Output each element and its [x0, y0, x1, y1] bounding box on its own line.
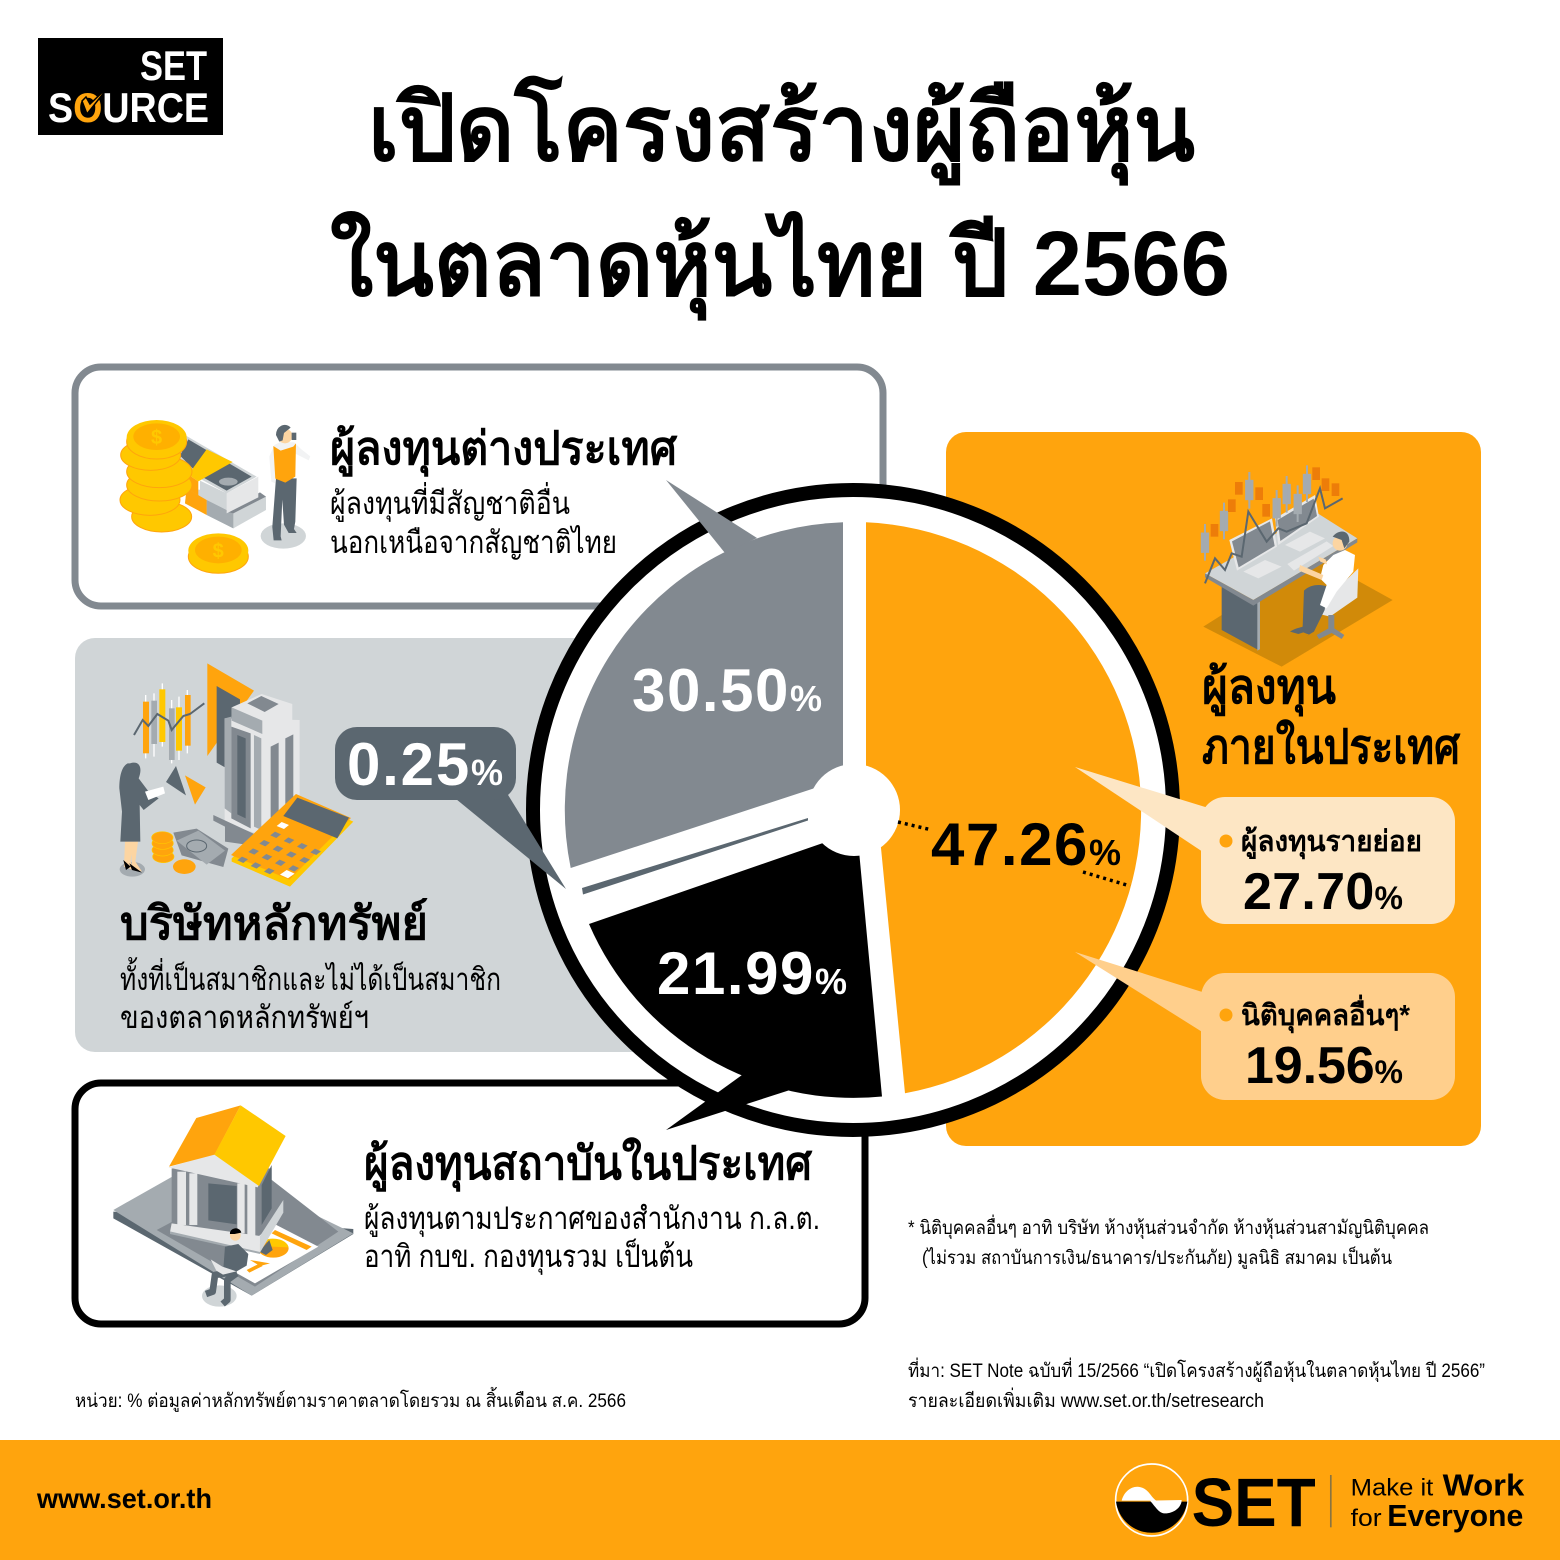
callout wedge: foreign [666, 480, 757, 553]
callout: other juristic persons: 19.56% [1245, 1037, 1403, 1095]
logo: SET: Make it [1351, 1475, 1434, 1502]
value: 47.26%: 47.26% [931, 811, 1121, 878]
slice: institutions 21.99% [589, 840, 882, 1098]
title: เปิดโครงสร้างผู้ถือหุ้น [368, 75, 1195, 186]
heading: ผู้ลงทุนต่างประเทศ [330, 422, 678, 477]
logo: SET: Work [1443, 1469, 1525, 1503]
icon: coins, cash and businessman: $ [213, 540, 224, 562]
icon: building, calculator and analyst [119, 663, 353, 887]
pie chart [533, 480, 1173, 1130]
heading: บริษัทหลักทรัพย์ [120, 897, 428, 949]
value: 30.50%: 30.50% [632, 657, 822, 724]
callout: 0.25%: 0.25% [347, 731, 503, 798]
heading: ผู้ลงทุน [1202, 661, 1336, 717]
panel: domestic investors [946, 432, 1481, 1146]
description [120, 957, 501, 1035]
title [330, 75, 1230, 321]
icon: coins, cash and businessman: $ [151, 427, 162, 449]
callout: retail investors: ผู้ลงทุนรายย่อย [1241, 826, 1422, 859]
description: ผู้ลงทุนที่มีสัญชาติอื่น [330, 482, 570, 523]
logo: SET: Everyone [1387, 1499, 1523, 1533]
logo: SET SOURCE: SOURCE [48, 84, 209, 131]
callout: 0.25% [335, 727, 566, 889]
footnote [908, 1214, 1429, 1269]
unit note: หน่วย: % ต่อมูลค่าหลักทรัพย์ตามราคาตลาดโดยรวม ณ สิ้นเดือน ส.ค. 2566 [75, 1387, 626, 1412]
description: ผู้ลงทุนตามประกาศของสำนักงาน ก.ล.ต. [364, 1201, 820, 1238]
panel: domestic institutions [75, 1083, 865, 1324]
source note: รายละเอียดเพิ่มเติม www.set.or.th/setresearch [908, 1387, 1264, 1412]
source note: ที่มา: SET Note ฉบับที่ 15/2566 “เปิดโครงสร้างผู้ถือหุ้นในตลาดหุ้นไทย ปี 2566” [908, 1357, 1485, 1383]
slice: foreign investors 30.50% [565, 522, 843, 868]
footnote: * นิติบุคคลอื่นๆ อาทิ บริษัท ห้างหุ้นส่วนจำกัด ห้างหุ้นส่วนสามัญนิติบุคคล [908, 1214, 1429, 1240]
heading: ผู้ลงทุนสถาบันในประเทศ [364, 1136, 813, 1192]
callout: retail investors: 27.70% [1243, 863, 1403, 921]
panel: foreign investors [75, 367, 883, 606]
logo: SET: SET [1192, 1465, 1316, 1541]
logo: SET SOURCE [38, 38, 223, 135]
callout: retail investors [1075, 767, 1455, 924]
icon: trader at desk [1201, 465, 1393, 667]
icon: coins, cash and businessman [120, 420, 310, 573]
description: ของตลาดหลักทรัพย์ฯ [120, 1000, 369, 1035]
leader dots [898, 822, 1130, 886]
panel: securities companies [75, 638, 695, 1052]
logo: SET: for [1351, 1505, 1382, 1532]
heading [1202, 661, 1461, 774]
callout: other juristic persons: นิติบุคคลอื่นๆ* [1241, 994, 1411, 1033]
icon: bank on tablet with investor [113, 1105, 353, 1307]
logo: SET [1116, 1464, 1525, 1541]
website: www.set.or.th [36, 1483, 212, 1514]
logo: SET SOURCE: SET [140, 42, 207, 89]
centre hub [808, 764, 900, 856]
callout wedge: institutions [666, 1075, 790, 1130]
heading: ภายในประเทศ [1202, 718, 1461, 774]
footnote: (ไม่รวม สถาบันการเงิน/ธนาคาร/ประกันภัย) มูลนิธิ สมาคม เป็นต้น [922, 1245, 1392, 1269]
footer band [0, 1440, 1560, 1560]
description [330, 482, 617, 560]
description: อาทิ กบข. กองทุนรวม เป็นต้น [364, 1238, 693, 1276]
title: ในตลาดหุ้นไทย ปี 2566 [330, 211, 1230, 321]
callout: other juristic persons [1075, 952, 1455, 1100]
slice: securities companies 0.25% [582, 818, 808, 894]
value: 21.99%: 21.99% [657, 940, 847, 1007]
slice: domestic investors 47.26% [866, 522, 1141, 1093]
description: ทั้งที่เป็นสมาชิกและไม่ได้เป็นสมาชิก [120, 957, 501, 997]
source note [908, 1357, 1485, 1412]
description: นอกเหนือจากสัญชาติไทย [330, 525, 617, 560]
description [364, 1201, 820, 1276]
